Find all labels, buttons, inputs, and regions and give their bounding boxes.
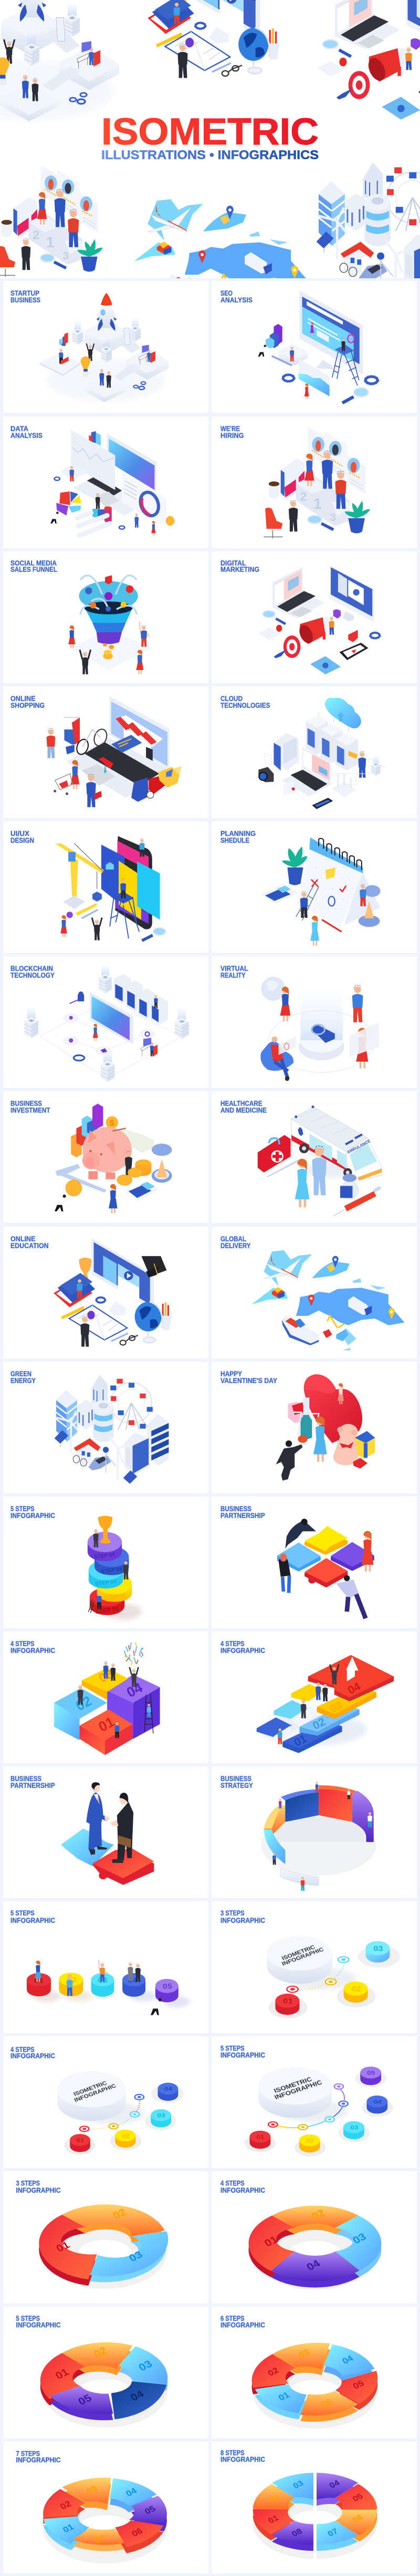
heading bbox=[10, 1235, 48, 1250]
segment 02 bbox=[272, 2205, 359, 2228]
heading: ONLINE bbox=[10, 695, 36, 703]
illustration: 4 steps: ISOMETRIC bbox=[72, 2080, 108, 2098]
segment 03: 03 bbox=[291, 2479, 306, 2490]
segment 02 bbox=[62, 2204, 165, 2236]
illustration: 4 steps: 01 bbox=[76, 2137, 85, 2143]
heading bbox=[220, 289, 253, 304]
illustration: ring bbox=[261, 1782, 376, 1891]
heading bbox=[10, 1370, 36, 1385]
heading: DESIGN bbox=[10, 836, 34, 844]
heading bbox=[10, 2046, 55, 2060]
segment 05: 05 bbox=[76, 2392, 94, 2407]
illustration: data analysis bbox=[50, 430, 174, 536]
illustration: cylinders: 04 bbox=[128, 1976, 138, 1984]
illustration: education bbox=[54, 1238, 172, 1347]
heading bbox=[220, 2449, 265, 2464]
illustration: 3 steps: ISOMETRIC bbox=[281, 1944, 316, 1962]
heading: 7 STEPS bbox=[16, 2450, 40, 2457]
segment 06: 06 bbox=[320, 2397, 334, 2409]
illustration: blocks: 02 bbox=[73, 1693, 94, 1714]
heading: 4 STEPS bbox=[220, 2180, 245, 2187]
segment 01: 01 bbox=[61, 2522, 76, 2535]
illustration: donut 8 bbox=[253, 2472, 377, 2561]
panel: cloud technologies bbox=[212, 686, 417, 818]
illustration: 4 steps: 03 bbox=[157, 2112, 165, 2119]
illustration: investment bbox=[55, 1104, 172, 1213]
panel: virtual reality bbox=[212, 956, 417, 1088]
segment 03 bbox=[62, 2478, 111, 2504]
heading: MARKETING bbox=[220, 566, 259, 573]
heading: INFOGRAPHIC bbox=[220, 2186, 265, 2194]
segment 03: 03 bbox=[297, 2348, 311, 2360]
segment 04 bbox=[271, 2252, 360, 2281]
segment 04: 04 bbox=[340, 2353, 355, 2366]
illustration: handshake bbox=[61, 1782, 154, 1885]
heading: 5 STEPS bbox=[10, 1909, 35, 1917]
segment 06 bbox=[115, 2520, 163, 2547]
illustration: hiring: 3 bbox=[330, 512, 336, 523]
panel: planning schedule bbox=[212, 821, 417, 953]
illustration: hiring: 2 bbox=[300, 490, 307, 504]
panel: digital marketing bbox=[212, 551, 417, 683]
heading: 4 STEPS bbox=[10, 2046, 35, 2054]
panel: 4 steps stairs bbox=[212, 1631, 417, 1763]
heading: INFOGRAPHIC bbox=[220, 2456, 265, 2464]
heading: 3 STEPS bbox=[220, 1909, 245, 1917]
segment 01 bbox=[39, 2215, 97, 2279]
heading: WE'RE bbox=[220, 425, 240, 433]
panel: green energy bbox=[3, 1362, 208, 1493]
illustration: healthcare: AMBULANCE bbox=[346, 1138, 371, 1155]
illustration: blocks: 01 bbox=[96, 1714, 117, 1735]
panel: online shopping bbox=[3, 686, 208, 818]
segment 01: 01 bbox=[267, 2514, 280, 2525]
heading bbox=[10, 1099, 50, 1114]
heading: DELIVERY bbox=[220, 1242, 251, 1250]
illustration: planning bbox=[261, 837, 380, 946]
heading bbox=[10, 1505, 55, 1520]
segment 04: 04 bbox=[304, 2258, 323, 2273]
heading: INFOGRAPHIC bbox=[16, 2456, 61, 2464]
heading bbox=[220, 1505, 265, 1520]
heading: VIRTUAL bbox=[220, 965, 248, 972]
heading: 3 STEPS bbox=[16, 2180, 40, 2187]
illustration: blocks bbox=[54, 1642, 160, 1755]
heading bbox=[220, 1775, 253, 1789]
header illustrations bbox=[0, 0, 420, 315]
panel: 5 steps infographic bubbles bbox=[212, 2036, 417, 2168]
segment 05: 05 bbox=[351, 2492, 365, 2504]
segment 07 bbox=[73, 2528, 124, 2546]
heading bbox=[16, 2315, 61, 2329]
illustration: hiring bbox=[264, 427, 370, 538]
illustration: 4 steps bbox=[57, 2071, 183, 2155]
segment 02 bbox=[62, 2342, 133, 2369]
panel: 8 steps donut bbox=[212, 2442, 417, 2573]
heading bbox=[220, 2045, 265, 2059]
illustration: stairs: 03 bbox=[328, 1699, 345, 1715]
segment 05 bbox=[335, 2484, 377, 2509]
segment 01 bbox=[40, 2353, 85, 2399]
heading bbox=[10, 289, 40, 304]
illustration: 4 steps: 04 bbox=[164, 2086, 172, 2092]
segment 04 bbox=[111, 2381, 166, 2419]
illustration: hiring: 1 bbox=[313, 496, 322, 512]
heading bbox=[10, 965, 55, 979]
illustration: 3 steps: 03 bbox=[373, 1945, 383, 1953]
heading: HEALTHCARE bbox=[220, 1099, 262, 1107]
illustration: 5 steps: 04 bbox=[374, 2099, 382, 2105]
heading: HIRING bbox=[220, 432, 244, 439]
segment 04: 04 bbox=[124, 2486, 139, 2498]
segment 02 bbox=[252, 2354, 295, 2388]
segment 01 bbox=[44, 2516, 89, 2544]
heading bbox=[220, 830, 256, 844]
illustration: cylinders: 05 bbox=[163, 1983, 172, 1991]
illustration: stairs: 04 bbox=[345, 1680, 363, 1697]
illustration: donut 4 bbox=[249, 2205, 381, 2290]
panel: global delivery bbox=[212, 1227, 417, 1358]
segment 07: 07 bbox=[92, 2533, 107, 2546]
illustration: cloud bbox=[258, 698, 384, 809]
segment 02: 02 bbox=[268, 2493, 282, 2504]
illustration: healthcare bbox=[258, 1106, 383, 1216]
segment 02: 02 bbox=[91, 2345, 109, 2360]
heading: BUSINESS bbox=[10, 1775, 41, 1783]
illustration: SEO bbox=[258, 290, 379, 403]
illustration: 5 steps: 01 bbox=[256, 2134, 265, 2140]
illustration: tower: STEP 05 bbox=[93, 1552, 116, 1561]
segment 01: 01 bbox=[53, 2366, 71, 2381]
panel: data analysis bbox=[3, 416, 208, 548]
panel: 5 steps cylinders bbox=[3, 1901, 208, 2033]
segment 02: 02 bbox=[266, 2365, 280, 2378]
heading: 8 STEPS bbox=[220, 2449, 245, 2457]
heading: INFOGRAPHIC bbox=[220, 2321, 265, 2329]
segment 06: 06 bbox=[130, 2526, 144, 2539]
panel: social media sales funnel bbox=[3, 551, 208, 683]
heading: PLANNING bbox=[220, 830, 256, 837]
heading: ENERGY bbox=[10, 1377, 36, 1385]
illustration: puzzle bbox=[277, 1519, 374, 1618]
heading bbox=[10, 559, 57, 573]
heading: TECHNOLOGIES bbox=[220, 701, 270, 709]
illustration: blocks: 03 bbox=[97, 1667, 115, 1685]
illustration: startup bbox=[40, 293, 169, 402]
heading bbox=[10, 1775, 55, 1789]
heading: INFOGRAPHIC bbox=[10, 1647, 55, 1654]
illustration: cylinders: 02 bbox=[67, 1976, 77, 1984]
title: ISOMETRIC bbox=[101, 111, 319, 153]
illustration: 5 steps: 05 bbox=[367, 2069, 375, 2076]
segment 04: 04 bbox=[328, 2479, 341, 2490]
illustration: 5 steps: INFOGRAPHIC bbox=[274, 2079, 323, 2101]
heading: INFOGRAPHIC bbox=[220, 1647, 265, 1654]
heading: 4 STEPS bbox=[10, 1640, 35, 1648]
illustration: 3 steps: 01 bbox=[283, 1997, 293, 2005]
illustration: stairs: 02 bbox=[311, 1715, 328, 1732]
heading: CLOUD bbox=[220, 695, 243, 703]
heading: SHEDULE bbox=[220, 836, 249, 844]
illustration: 3 steps: INFOGRAPHIC bbox=[281, 1947, 325, 1967]
illustration: digital marketing bbox=[258, 565, 381, 674]
heading: INFOGRAPHIC bbox=[220, 2051, 265, 2059]
illustration: cylinders: 01 bbox=[34, 1976, 44, 1984]
heading bbox=[220, 1235, 251, 1250]
segment 03: 03 bbox=[127, 2249, 145, 2264]
heading: BUSINESS bbox=[10, 1099, 42, 1107]
heading: INFOGRAPHIC bbox=[16, 2186, 61, 2194]
segment 04 bbox=[317, 2473, 358, 2499]
heading: SOCIAL MEDIA bbox=[10, 559, 57, 567]
illustration: tower bbox=[88, 1516, 142, 1620]
panel: business strategy bbox=[212, 1766, 417, 1898]
illustration: tower: STEP 03 bbox=[95, 1579, 117, 1587]
panel: 4 steps donut bbox=[212, 2171, 417, 2303]
heading: HAPPY bbox=[220, 1370, 242, 1378]
illustration: 3 steps bbox=[267, 1936, 400, 2018]
segment 06 bbox=[300, 2391, 358, 2415]
panel: 6 steps donut bbox=[212, 2306, 417, 2438]
heading bbox=[220, 1640, 265, 1654]
panel: 7 steps donut bbox=[3, 2442, 208, 2573]
heading: TECHNOLOGY bbox=[10, 971, 55, 979]
illustration: valentine bbox=[276, 1374, 375, 1481]
segment 03: 03 bbox=[351, 2231, 369, 2246]
heading: ANALYSIS bbox=[10, 432, 43, 439]
heading: INFOGRAPHIC bbox=[10, 2052, 55, 2060]
illustration: cylinders bbox=[27, 1960, 190, 2015]
segment 04 bbox=[323, 2344, 374, 2376]
panel: 3 steps donut bbox=[3, 2171, 208, 2303]
illustration: stairs bbox=[257, 1655, 394, 1753]
heading: DATA bbox=[10, 425, 28, 433]
segment 03 bbox=[335, 2216, 381, 2270]
illustration: online shopping bbox=[47, 696, 182, 807]
heading: AND MEDICINE bbox=[220, 1106, 267, 1114]
heading: 5 STEPS bbox=[220, 2045, 245, 2052]
segment 01: 01 bbox=[262, 2234, 280, 2249]
illustration: delivery bbox=[252, 1250, 404, 1350]
panel: 3 steps infographic bbox=[212, 1901, 417, 2033]
illustration: funnel bbox=[68, 575, 153, 674]
illustration: stairs: 01 bbox=[292, 1732, 309, 1749]
heading: BLOCKCHAIN bbox=[10, 965, 53, 972]
segment 02 bbox=[43, 2489, 85, 2517]
segment 05 bbox=[50, 2386, 113, 2414]
segment 06 bbox=[335, 2509, 377, 2535]
panel: online education bbox=[3, 1227, 208, 1358]
heading: SHOPPING bbox=[10, 701, 45, 709]
segment 04: 04 bbox=[128, 2388, 146, 2403]
illustration: 4 steps: INFOGRAPHIC bbox=[74, 2083, 117, 2103]
segment 02: 02 bbox=[309, 2207, 327, 2222]
segment 01 bbox=[255, 2384, 307, 2413]
heading: BUSINESS bbox=[220, 1775, 251, 1783]
heading: SALES FUNNEL bbox=[10, 566, 57, 573]
illustration: 5 steps: 02 bbox=[306, 2138, 314, 2144]
panel: happy valentine's day bbox=[212, 1362, 417, 1493]
panel: 5 steps donut bbox=[3, 2306, 208, 2438]
heading bbox=[220, 1909, 265, 1924]
illustration: 5 steps bbox=[245, 2067, 393, 2156]
panel: business partnership handshake bbox=[3, 1766, 208, 1898]
illustration: 5 steps: 03 bbox=[350, 2124, 359, 2131]
segment 08: 08 bbox=[290, 2527, 304, 2538]
heading: VALENTINE'S DAY bbox=[220, 1377, 277, 1385]
panel: SEO analysis bbox=[212, 281, 417, 413]
illustration: donut 5 bbox=[40, 2342, 167, 2427]
header panel bbox=[0, 0, 420, 278]
illustration: blocks: 04 bbox=[124, 1679, 145, 1701]
panel: startup business bbox=[3, 281, 208, 413]
segment 01: 01 bbox=[277, 2390, 291, 2402]
heading bbox=[10, 830, 34, 844]
segment 02: 02 bbox=[111, 2206, 129, 2222]
heading: DIGITAL bbox=[220, 559, 246, 567]
segment 05: 05 bbox=[351, 2379, 366, 2391]
heading: PARTNERSHIP bbox=[10, 1782, 55, 1789]
segment 06: 06 bbox=[351, 2514, 365, 2525]
heading bbox=[220, 425, 244, 439]
panel: business investment bbox=[3, 1091, 208, 1223]
segment 03 bbox=[272, 2343, 330, 2369]
heading bbox=[220, 965, 248, 979]
heading bbox=[220, 2180, 265, 2194]
illustration: blockchain bbox=[24, 964, 189, 1082]
illustration: 5 steps: ISOMETRIC bbox=[273, 2076, 313, 2095]
heading bbox=[16, 2180, 61, 2194]
kneeling man bbox=[276, 1444, 303, 1481]
segment 03 bbox=[272, 2473, 313, 2499]
segment 03: 03 bbox=[85, 2484, 99, 2496]
segment 03: 03 bbox=[136, 2358, 154, 2373]
heading: SEO bbox=[220, 289, 233, 297]
heading: INFOGRAPHIC bbox=[220, 1917, 265, 1924]
heading: PARTNERSHIP bbox=[220, 1512, 265, 1520]
illustration: tower: STEP 04 bbox=[101, 1566, 123, 1575]
heading bbox=[220, 2315, 265, 2329]
heading: 5 STEPS bbox=[16, 2315, 40, 2322]
heading bbox=[10, 1640, 55, 1654]
heading: STRATEGY bbox=[220, 1782, 253, 1789]
illustration: donut 6 bbox=[252, 2343, 377, 2428]
heading: EDUCATION bbox=[10, 1242, 48, 1250]
heading: 6 STEPS bbox=[220, 2315, 245, 2322]
illustration: 4 steps: 02 bbox=[122, 2132, 130, 2139]
segment 07 bbox=[317, 2521, 358, 2544]
heading: GLOBAL bbox=[220, 1235, 246, 1243]
heading bbox=[220, 1099, 267, 1114]
heading: UI/UX bbox=[10, 830, 29, 837]
panel: 4 steps infographic bubbles bbox=[3, 2036, 208, 2168]
illustration: donut 3 bbox=[39, 2204, 168, 2289]
heading bbox=[10, 1909, 55, 1924]
segment 05 bbox=[129, 2496, 167, 2525]
heading: INVESTMENT bbox=[10, 1106, 50, 1114]
segment 01 bbox=[249, 2216, 295, 2271]
illustration: VR bbox=[260, 977, 379, 1081]
segment 01: 01 bbox=[54, 2239, 72, 2254]
segment 02: 02 bbox=[58, 2499, 73, 2511]
panel: 5 steps infographic tower bbox=[3, 1496, 208, 1628]
heading bbox=[220, 695, 270, 709]
segment 01 bbox=[253, 2509, 295, 2534]
heading bbox=[220, 559, 259, 573]
heading bbox=[10, 695, 45, 709]
illustration: tower: STEP 01 bbox=[95, 1606, 119, 1615]
segment 03 bbox=[119, 2347, 167, 2384]
illustration: UI/UX bbox=[56, 836, 165, 940]
heading bbox=[10, 425, 43, 439]
segment 05: 05 bbox=[143, 2504, 158, 2516]
heading bbox=[16, 2450, 61, 2464]
panel: healthcare and medicine bbox=[212, 1091, 417, 1223]
panel: business partnership puzzle bbox=[212, 1496, 417, 1628]
illustration: energy bbox=[55, 1375, 169, 1484]
segment 08 bbox=[272, 2521, 313, 2544]
heading: STARTUP bbox=[10, 289, 39, 297]
heading: 5 STEPS bbox=[10, 1505, 35, 1513]
illustration: donut 7 bbox=[43, 2478, 167, 2563]
heading: 4 STEPS bbox=[220, 1640, 245, 1648]
segment 03 bbox=[90, 2231, 168, 2276]
panel: we're hiring bbox=[212, 416, 417, 548]
segment 05 bbox=[335, 2371, 377, 2404]
illustration: investment: $ bbox=[110, 1118, 114, 1127]
panel: blockchain technology bbox=[3, 956, 208, 1088]
illustration: tower: STEP 02 bbox=[104, 1593, 125, 1601]
segment 02 bbox=[253, 2484, 295, 2509]
heading: GREEN bbox=[10, 1370, 32, 1378]
segment 04 bbox=[110, 2478, 156, 2506]
heading: BUSINESS bbox=[220, 1505, 251, 1513]
heading: INFOGRAPHIC bbox=[10, 1917, 55, 1924]
heading: REALITY bbox=[220, 971, 246, 979]
illustration: 3 steps: 02 bbox=[351, 1985, 361, 1993]
panel: 4 steps blocks bbox=[3, 1631, 208, 1763]
illustration: cylinders: 03 bbox=[98, 1976, 107, 1984]
heading bbox=[220, 1370, 277, 1385]
heading: BUSINESS bbox=[10, 296, 40, 304]
heading: INFOGRAPHIC bbox=[16, 2321, 61, 2329]
heading: ONLINE bbox=[10, 1235, 36, 1243]
heading: ANALYSIS bbox=[220, 296, 253, 304]
heading: INFOGRAPHIC bbox=[10, 1512, 55, 1520]
panel: UI/UX design bbox=[3, 821, 208, 953]
subtitle: ILLUSTRATIONS • INFOGRAPHICS bbox=[101, 148, 319, 162]
segment 07: 07 bbox=[326, 2527, 340, 2538]
